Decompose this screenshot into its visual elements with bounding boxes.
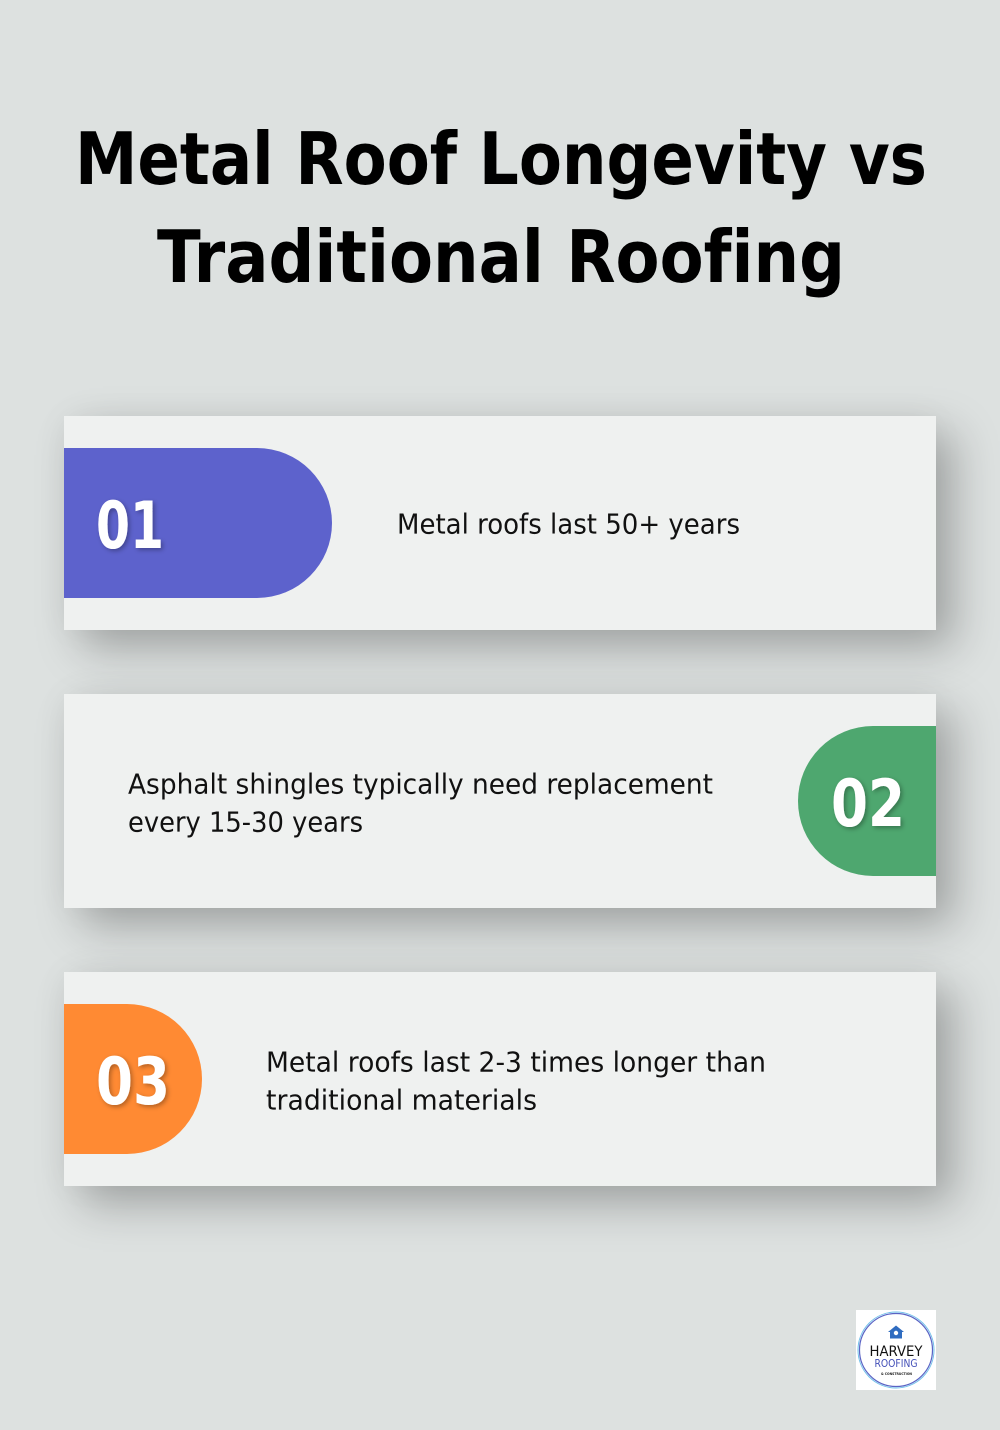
text: card 02: Asphalt shingles typically need replacement	[128, 768, 713, 800]
panel: card 02	[64, 694, 936, 908]
badge: 02	[798, 726, 936, 876]
text: card 02	[128, 768, 713, 838]
text: card 03: traditional materials	[266, 1084, 537, 1116]
panel: card 01	[64, 416, 936, 630]
text: card 01: Metal roofs last 50+ years	[397, 508, 740, 540]
title: Metal Roof Longevity vs	[75, 117, 927, 201]
logo: Harvey Roofing: & CONSTRUCTION	[881, 1372, 912, 1376]
badge: 03	[64, 1004, 202, 1154]
number 03: 03	[96, 1045, 170, 1120]
text: card 03	[266, 1046, 766, 1116]
logo: Harvey Roofing: HARVEY	[870, 1344, 923, 1360]
text: card 02: every 15-30 years	[128, 806, 363, 838]
logo: Harvey Roofing	[856, 1310, 936, 1390]
logo: Harvey Roofing: ROOFING	[874, 1357, 918, 1370]
badge: 01	[64, 448, 332, 598]
title	[75, 117, 927, 299]
panel: card 03	[64, 972, 936, 1186]
text: card 03: Metal roofs last 2-3 times longer than	[266, 1046, 766, 1078]
number 02: 02	[831, 767, 905, 842]
icon: house	[888, 1326, 904, 1338]
title: Traditional Roofing	[157, 215, 845, 299]
number 01: 01	[96, 489, 164, 564]
